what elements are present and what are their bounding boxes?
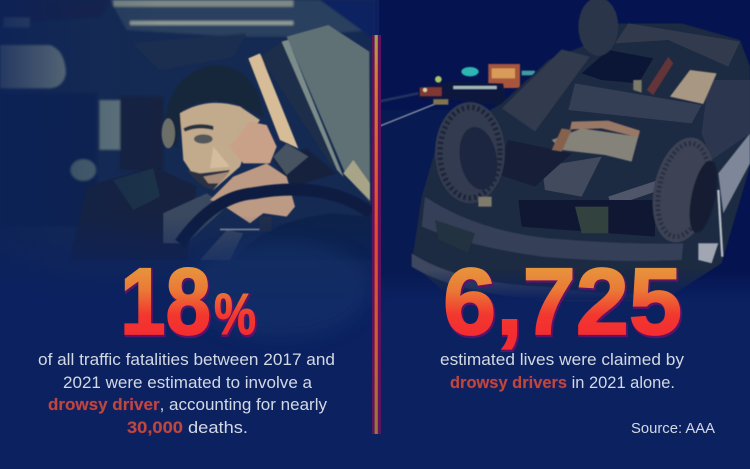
side window and pillar	[248, 25, 370, 202]
distant police cars	[378, 64, 535, 127]
left edge shade	[0, 0, 160, 300]
seat headrest and interior	[0, 93, 163, 227]
panel: overturned car photo	[378, 0, 750, 300]
panel: drowsy driver photo	[0, 0, 375, 340]
text block: right description: estimated lives were claimed by	[440, 351, 685, 369]
statistic: 6,725: 6,725	[443, 249, 682, 355]
text block: left description: 2021 were estimated to involve a	[63, 374, 313, 392]
text block: left description: of all traffic fatalities between 2017 and	[38, 351, 335, 369]
car bumper and side panel	[412, 133, 750, 300]
text block: left description	[38, 351, 335, 437]
centre divider	[372, 35, 381, 434]
text block: left description: drowsy driver, accounting for nearly	[48, 396, 328, 414]
text block: right description	[440, 351, 685, 392]
car ceiling	[0, 0, 375, 70]
steering wheel	[180, 190, 372, 260]
car tyres	[435, 0, 723, 248]
driver body	[70, 143, 337, 260]
photo fade to navy	[379, 270, 750, 300]
photo fade to navy	[0, 215, 375, 300]
driver hands	[210, 122, 295, 223]
statistic: 6,725: 6,725	[444, 250, 683, 356]
car body	[412, 23, 750, 300]
statistic: 18 percent: %	[214, 282, 256, 347]
car engine parts	[552, 57, 717, 162]
text block: left description: 30,000 deaths.	[127, 419, 248, 437]
text block: right description: drowsy drivers in 2021 alone.	[450, 374, 675, 392]
statistic: 18 percent: 18	[121, 250, 212, 356]
driver head	[162, 65, 263, 190]
source note: Source: AAA	[631, 421, 715, 437]
rear-view mirror	[0, 17, 66, 88]
statistic: 18 percent: %	[215, 284, 257, 348]
statistic: 18 percent: 18	[120, 249, 211, 355]
